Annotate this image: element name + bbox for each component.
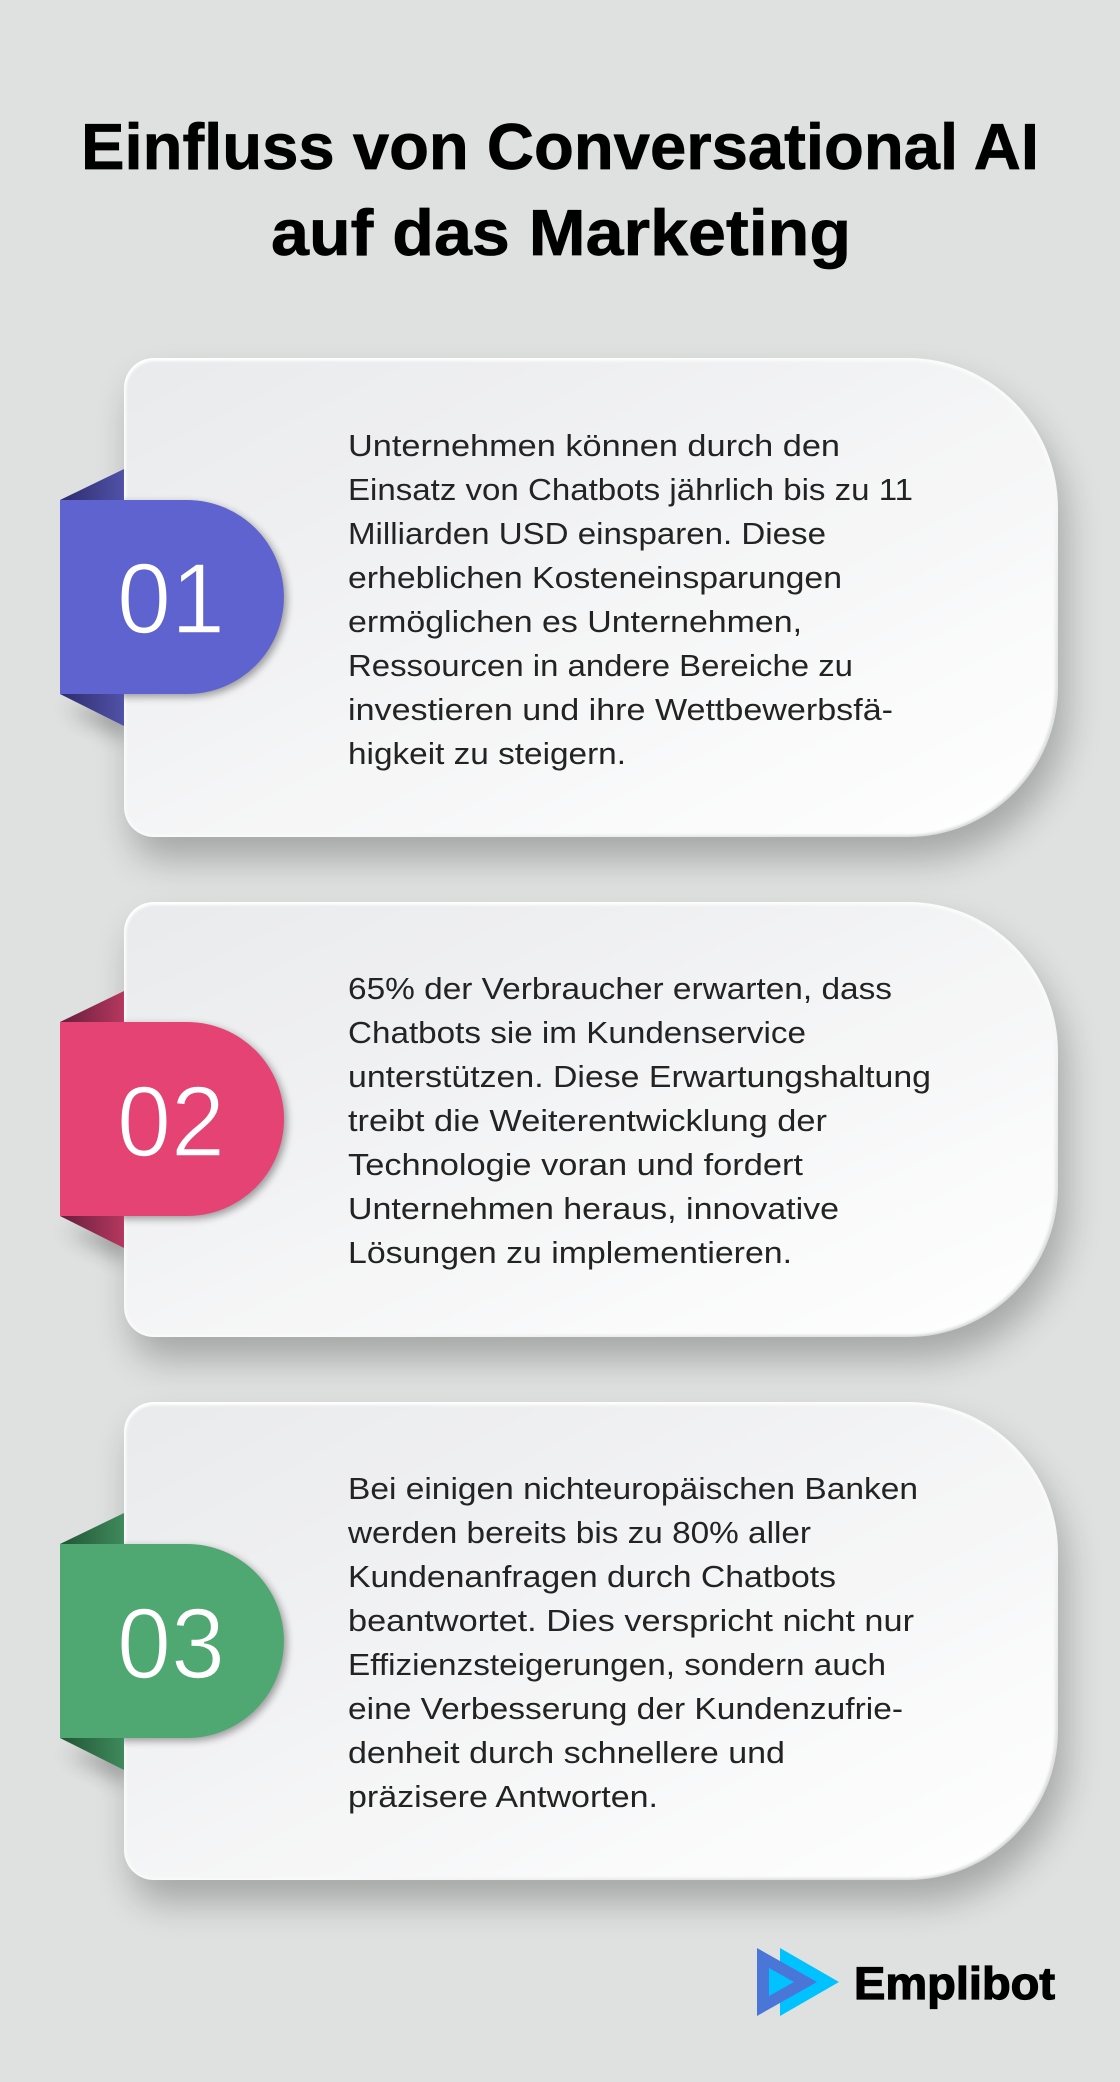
card 3 text: eine Verbesserung der Kundenzufrie- (348, 1691, 903, 1726)
title: Einfluss von Conversational AI (81, 110, 1039, 183)
card 2 text: unterstützen. Diese Erwartungshaltung (348, 1059, 931, 1094)
panel: card 1 (60, 358, 1066, 859)
wordmark: Emplibot (854, 1958, 1055, 2009)
card 2 text: Unternehmen heraus, innovative (348, 1191, 839, 1226)
card 2 text: 65% der Verbraucher erwarten, dass (348, 971, 892, 1006)
card 2 text: Lösungen zu implementieren. (348, 1235, 792, 1270)
icon: play triangles (757, 1948, 839, 2016)
card 3 text: beantwortet. Dies verspricht nicht nur (348, 1603, 914, 1638)
card 2 ribbon tabs (60, 991, 128, 1262)
card 1 text: ermöglichen es Unternehmen, (348, 604, 802, 639)
panel: card 2 (60, 902, 1066, 1359)
card 3 text: Kundenanfragen durch Chatbots (348, 1559, 836, 1594)
card 3 text: Bei einigen nichteuropäischen Banken (348, 1471, 918, 1506)
card 3 badge: 03 (117, 1588, 225, 1700)
card 1 text (348, 428, 913, 771)
card 1 text: Einsatz von Chatbots jährlich bis zu 11 (348, 472, 913, 507)
card 3 badge (60, 1544, 287, 1741)
card 1 text: erheblichen Kosteneinsparungen (348, 560, 842, 595)
card 2 text (348, 971, 931, 1270)
card 2 text: Technologie voran und fordert (348, 1147, 803, 1182)
card 1 badge: 01 (117, 543, 225, 655)
card 1 ribbon tabs (60, 469, 128, 740)
logo: Emplibot (757, 1948, 1055, 2016)
card 1 text: investieren und ihre Wettbewerbsfä- (348, 692, 893, 727)
title (81, 110, 1039, 269)
card 1 text: Milliarden USD einsparen. Diese (348, 516, 826, 551)
card 1 surface (124, 358, 1058, 837)
card 3 text: präzisere Antworten. (348, 1779, 658, 1814)
card 3 shadow (132, 1424, 1066, 1902)
card 3 text: denheit durch schnellere und (348, 1735, 785, 1770)
card 3 text: Effizienzsteigerungen, sondern auch (348, 1647, 886, 1682)
card 3 ribbon tabs (60, 1513, 128, 1784)
card 2 text: treibt die Weiterentwicklung der (348, 1103, 827, 1138)
card 3 surface (124, 1402, 1058, 1880)
card 3 text (347, 1471, 918, 1814)
panel: card 3 (60, 1402, 1066, 1902)
card 2 text: Chatbots sie im Kundenservice (348, 1015, 806, 1050)
card 3 text: werden bereits bis zu 80% aller (347, 1515, 811, 1550)
card 2 badge: 02 (117, 1066, 225, 1178)
title: auf das Marketing (271, 196, 851, 269)
card 1 badge (60, 500, 287, 697)
card 2 badge (60, 1022, 287, 1219)
card 1 text: Unternehmen können durch den (348, 428, 840, 463)
card 2 surface (124, 902, 1058, 1337)
card 2 shadow (132, 924, 1066, 1359)
card 1 shadow (132, 380, 1066, 859)
card 1 text: Ressourcen in andere Bereiche zu (348, 648, 853, 683)
card 1 text: higkeit zu steigern. (348, 736, 626, 771)
